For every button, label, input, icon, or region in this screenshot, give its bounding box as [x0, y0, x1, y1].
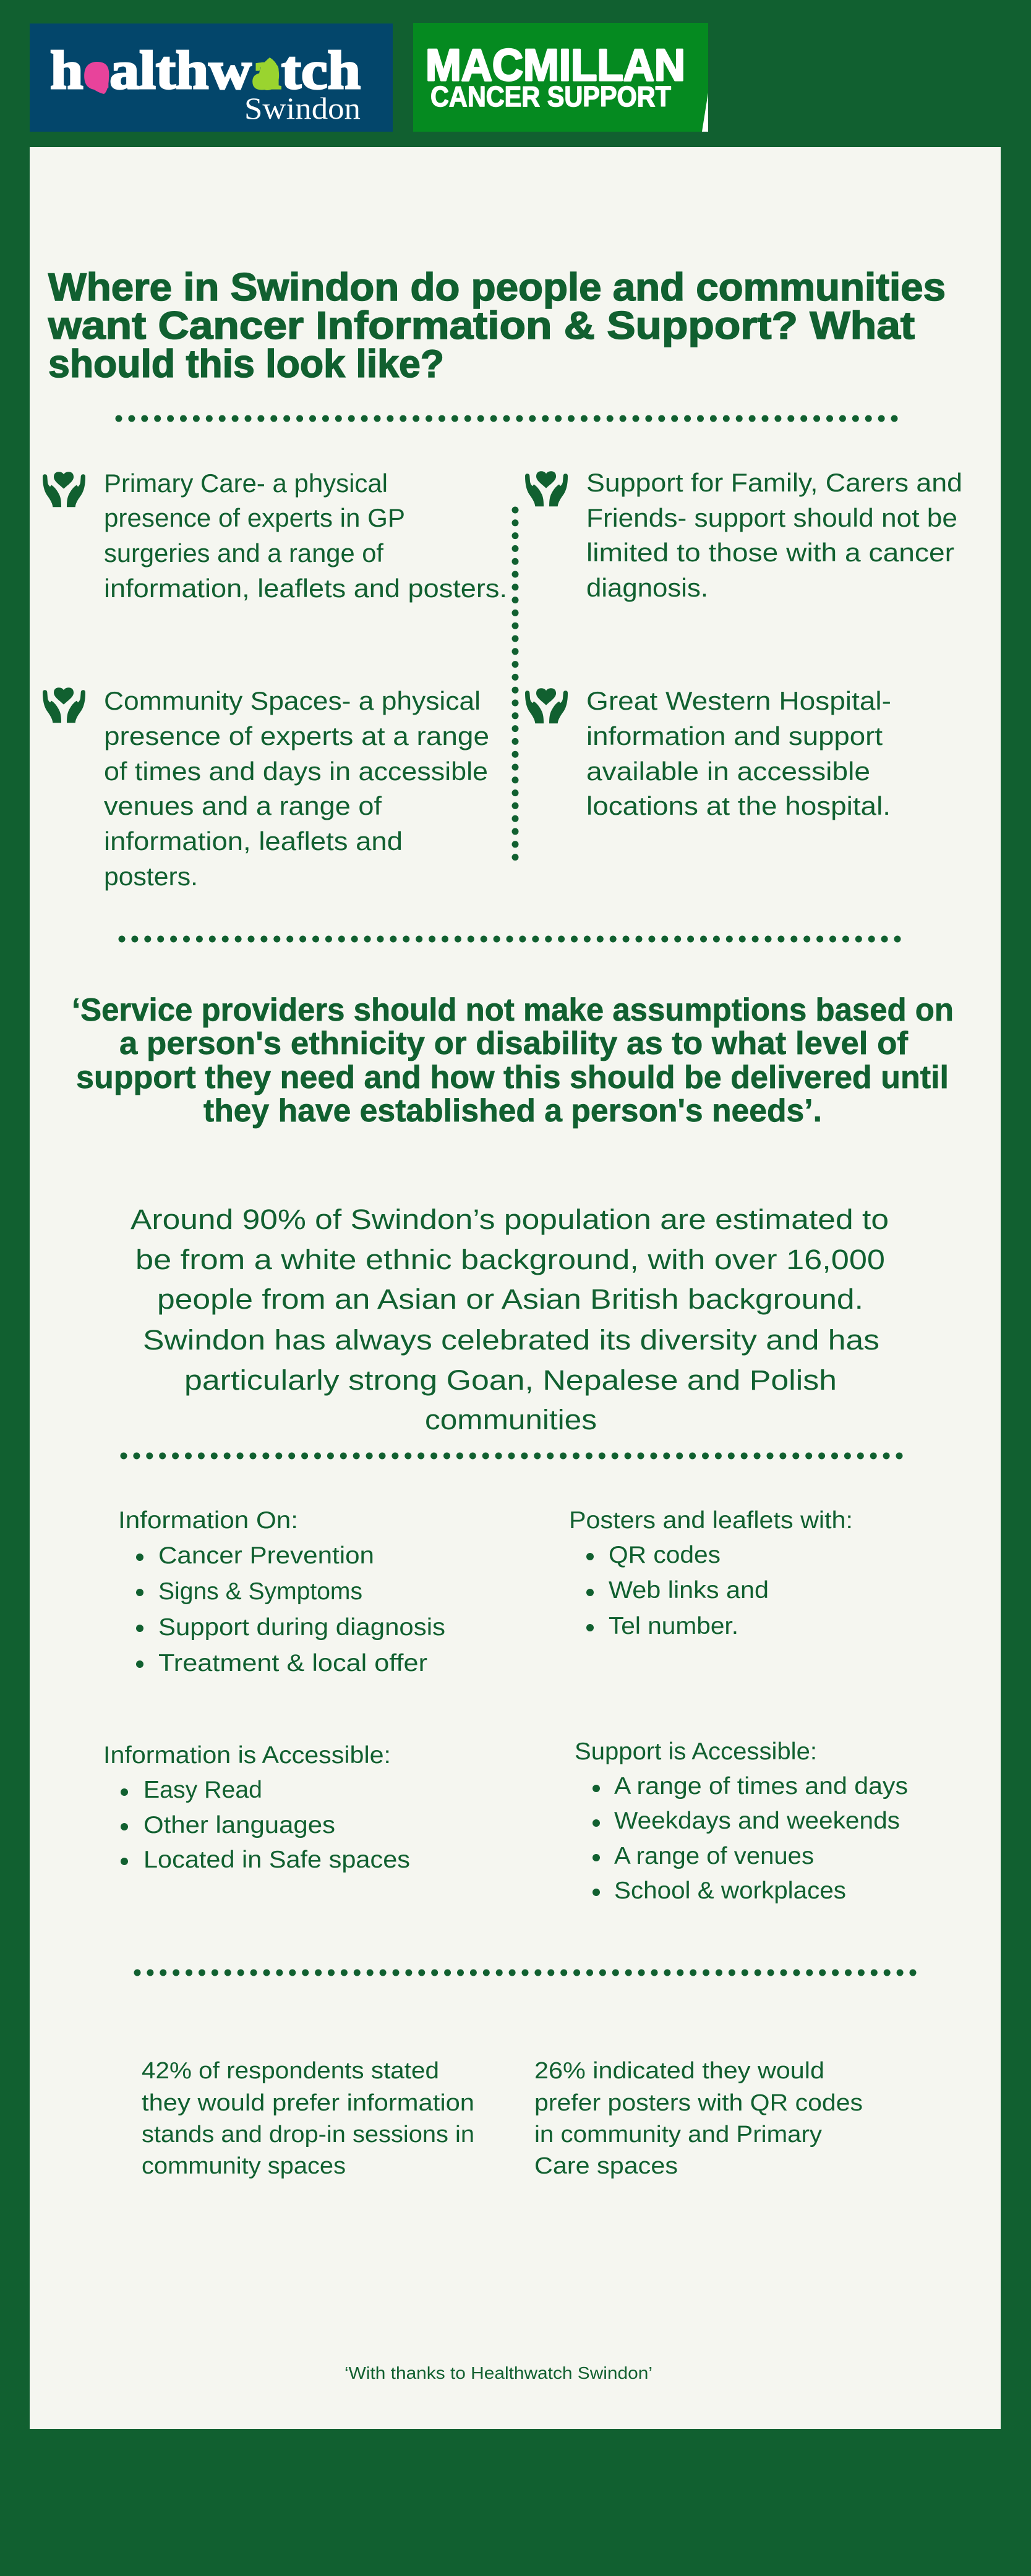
list: Posters and leaflets: QR codes	[609, 1542, 721, 1568]
list: Support is Accessible	[575, 1738, 908, 1904]
title: should this look like?	[48, 342, 444, 386]
quote: support they need and how this should be delivered until	[76, 1060, 949, 1095]
icon: hands holding heart	[525, 471, 568, 506]
text: Community Spaces: venues and a range of	[104, 791, 382, 820]
list: Information On: Signs & Symptoms	[158, 1578, 362, 1605]
stat: 26% indicated: prefer posters with QR codes	[534, 2090, 863, 2116]
text block: population: particularly strong Goan, Nepalese and Polish	[184, 1364, 837, 1396]
footer: thanks: ‘With thanks to Healthwatch Swindon’	[344, 2363, 652, 2383]
text: Great Western Hospital: information and support	[586, 721, 883, 750]
text: Support for Family: Support for Family, Carers and	[586, 468, 962, 497]
text: Great Western Hospital: Great Western Hospital-	[586, 686, 891, 715]
list: Support is Accessible: Support is Accessible:	[575, 1738, 817, 1765]
text: Great Western Hospital: locations at the hospital.	[586, 791, 891, 820]
list: Posters and leaflets: Web links and	[609, 1577, 769, 1604]
text: Community Spaces	[104, 686, 489, 891]
block: Great Western Hospital	[525, 686, 891, 820]
list: Information On	[118, 1507, 445, 1677]
block: Community Spaces	[43, 686, 489, 891]
list: Information On: Information On:	[118, 1507, 298, 1534]
stat: 26% indicated	[534, 2058, 863, 2179]
text block: population: be from a white ethnic background, with over 16,000	[135, 1244, 885, 1275]
text: Support for Family	[586, 468, 962, 602]
list: Information On: Cancer Prevention	[158, 1542, 374, 1569]
logo: Macmillan Cancer Support	[413, 23, 708, 132]
list: Support is Accessible: A range of venues	[614, 1843, 814, 1869]
list: Posters and leaflets: Posters and leaflets with:	[569, 1507, 853, 1534]
stat: 42% of respondents: community spaces	[142, 2153, 346, 2179]
icon: hands holding heart	[525, 688, 568, 723]
list: Support is Accessible: A range of times and days	[614, 1773, 908, 1800]
text: Great Western Hospital: available in accessible	[586, 757, 870, 786]
text block: population	[130, 1204, 889, 1435]
logo: Healthwatch Swindon	[30, 23, 393, 132]
list: Information is Accessible: Other languages	[143, 1812, 335, 1838]
list: Support is Accessible: School & workplaces	[614, 1877, 846, 1904]
list: Information is Accessible: Information is Accessible:	[103, 1742, 391, 1769]
list: Posters and leaflets	[569, 1507, 853, 1639]
stat: 42% of respondents: stands and drop-in sessions in	[142, 2122, 474, 2148]
text: Community Spaces: Community Spaces- a physical	[104, 686, 481, 715]
title	[48, 266, 946, 386]
text: Community Spaces: presence of experts at a range	[104, 721, 489, 750]
block: Support for Family	[525, 468, 962, 602]
quote: ‘Service providers should not make assumptions based on	[72, 992, 954, 1028]
stat: 42% of respondents: 42% of respondents stated	[142, 2058, 439, 2084]
text: Primary Care: information, leaflets and posters.	[104, 574, 507, 603]
text block: population: people from an Asian or Asian British background.	[157, 1283, 863, 1315]
stat: 42% of respondents	[142, 2058, 474, 2179]
list: Information is Accessible: Located in Safe spaces	[143, 1847, 410, 1873]
text: Great Western Hospital	[586, 686, 891, 820]
logo: Macmillan Cancer Support: CANCER SUPPORT	[430, 80, 671, 113]
text: Primary Care: surgeries and a range of	[104, 538, 383, 567]
logo: Healthwatch Swindon: Swindon	[244, 91, 361, 125]
text: Community Spaces: posters.	[104, 862, 198, 891]
text block: population: communities	[425, 1404, 597, 1435]
block: Primary Care	[43, 469, 507, 603]
stat: 42% of respondents: they would prefer information	[142, 2090, 474, 2116]
stat: 26% indicated: in community and Primary	[534, 2122, 822, 2148]
text: Support for Family: limited to those with a cancer	[586, 538, 954, 567]
text: Support for Family: Friends- support should not be	[586, 503, 957, 532]
icon: hands holding heart	[43, 472, 85, 507]
quote: they have established a person's needs’.	[203, 1093, 822, 1129]
title: want Cancer Information & Support? What	[48, 304, 915, 347]
text: Primary Care: presence of experts in GP	[104, 503, 405, 532]
logo: Macmillan Cancer Support: MACMILLAN	[426, 41, 685, 90]
list: Information On: Treatment & local offer	[158, 1650, 427, 1677]
stat: 26% indicated: 26% indicated they would	[534, 2058, 824, 2084]
quote	[72, 992, 954, 1129]
list: Information is Accessible: Easy Read	[143, 1777, 262, 1803]
list: Posters and leaflets: Tel number.	[609, 1613, 738, 1639]
title: Where in Swindon do people and communities	[48, 266, 946, 309]
stat: 26% indicated: Care spaces	[534, 2153, 678, 2179]
logo: Healthwatch Swindon: healthwatch	[50, 41, 361, 101]
text block: population: Around 90% of Swindon’s population are estimated to	[130, 1204, 889, 1235]
text block: population: Swindon has always celebrated its diversity and has	[143, 1324, 879, 1356]
text: Community Spaces: information, leaflets and	[104, 827, 403, 856]
list: Information On: Support during diagnosis	[158, 1614, 445, 1641]
text: Primary Care	[104, 469, 507, 603]
icon: hands holding heart	[43, 687, 85, 723]
quote: a person's ethnicity or disability as to what level of	[119, 1026, 909, 1061]
list: Information is Accessible	[103, 1742, 410, 1873]
text: Support for Family: diagnosis.	[586, 573, 708, 602]
text: Primary Care: Primary Care- a physical	[104, 469, 388, 498]
list: Support is Accessible: Weekdays and weekends	[614, 1808, 900, 1834]
text: Community Spaces: of times and days in accessible	[104, 757, 488, 786]
